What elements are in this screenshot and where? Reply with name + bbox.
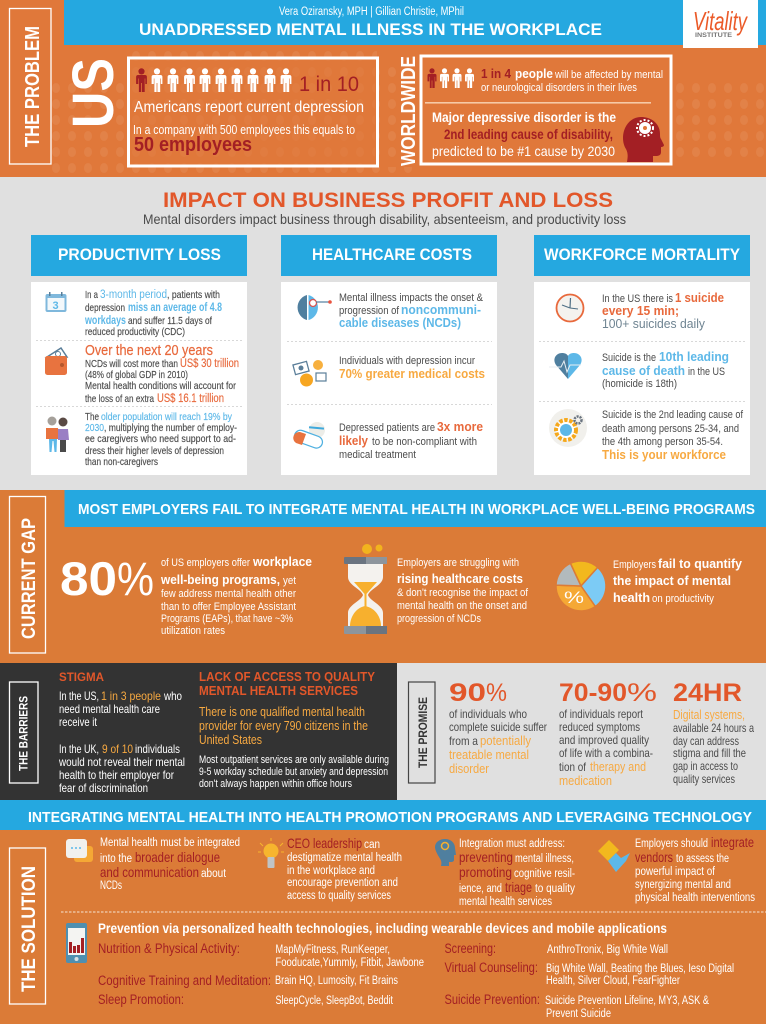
section tab: the barriers bbox=[10, 682, 38, 783]
panel heading: PRODUCTIVITY LOSS bbox=[58, 246, 221, 264]
text block: & don't recognise the impact of bbox=[397, 587, 529, 599]
logo: Vitality Institute bbox=[683, 0, 758, 48]
column: vendors: integrate bbox=[711, 835, 754, 850]
column: integration: mental health services bbox=[459, 896, 552, 908]
column: lack of access: United States bbox=[199, 733, 262, 747]
column: CEO leadership: can bbox=[364, 839, 380, 851]
text block: than non-caregivers bbox=[85, 456, 158, 468]
table: technologies, right column bbox=[444, 941, 734, 1020]
text block: every 15 min; bbox=[602, 303, 679, 318]
panel: the barriers bbox=[0, 663, 397, 800]
label: worldwide: WORLDWIDE bbox=[397, 56, 420, 166]
text block: the impact of mental bbox=[613, 573, 731, 588]
text block: 10th leading bbox=[659, 349, 729, 364]
panel: the promise bbox=[397, 663, 766, 800]
section tab: the problem: THE PROBLEM bbox=[21, 26, 44, 147]
text block: 3-month period bbox=[100, 289, 167, 301]
text block: the loss of an extra bbox=[85, 393, 154, 405]
text: 1 in 4 people: 1 in 4 bbox=[481, 66, 512, 81]
text block: utilization rates bbox=[161, 625, 225, 637]
column: 24HR: 24HR bbox=[673, 679, 742, 707]
text block: The bbox=[85, 411, 99, 423]
table: technologies, left column: SleepCycle, SleepBot, Beddit bbox=[276, 995, 394, 1007]
table: technologies, left column: Cognitive Training and Meditation: bbox=[98, 973, 271, 988]
column: 90%: complete suicide suffer bbox=[449, 720, 547, 734]
text block bbox=[602, 349, 729, 390]
text block: Mental illness impacts the onset & bbox=[339, 292, 484, 304]
text block: workdays bbox=[84, 313, 126, 327]
text block: Depressed patients are bbox=[339, 422, 435, 434]
icon: head profile bbox=[435, 839, 456, 866]
text block bbox=[602, 290, 724, 331]
text block bbox=[613, 556, 743, 605]
text block: US$ 16.1 trillion bbox=[157, 393, 224, 405]
column: vendors: synergizing mental and bbox=[635, 879, 731, 891]
text block: yet bbox=[283, 575, 296, 587]
panel: US statistics bbox=[128, 58, 378, 166]
text block: likely bbox=[339, 433, 369, 448]
text block bbox=[339, 292, 484, 330]
banner bbox=[0, 800, 766, 830]
icon: hourglass bbox=[344, 544, 387, 634]
text block bbox=[397, 557, 529, 625]
column: 70-90%: tion of bbox=[559, 760, 587, 774]
table: technologies, left column bbox=[98, 941, 424, 1007]
column: integration: ience, and bbox=[459, 883, 502, 895]
text block: NCDs will cost more than bbox=[85, 358, 178, 370]
column: integration: mental illness, bbox=[515, 853, 574, 865]
column: lack of access bbox=[199, 670, 389, 790]
text: 1 in 4 people bbox=[481, 66, 663, 94]
table: technologies, right column: Screening: bbox=[444, 941, 496, 956]
text block: few address mental health other bbox=[161, 588, 296, 600]
column: stigma: In the UK, bbox=[59, 742, 99, 756]
heading: IMPACT ON BUSINESS PROFIT AND LOSS bbox=[163, 188, 613, 212]
column: dialogue: broader dialogue bbox=[135, 849, 220, 865]
column: 90%: 90 bbox=[449, 679, 486, 707]
text block: Programs (EAPs), that have ~3% bbox=[161, 613, 293, 625]
column: vendors: powerful impact of bbox=[635, 866, 716, 878]
column: CEO leadership: destigmatize mental health bbox=[287, 852, 402, 864]
text block: 70% greater medical costs bbox=[339, 366, 485, 381]
text: prevention heading: Prevention via personalized health technologies, including wearable devices and mobile applications bbox=[98, 921, 667, 936]
column: stigma: fear of discrimination bbox=[59, 781, 148, 795]
text block: Mental health conditions will account for bbox=[85, 380, 236, 392]
text block bbox=[160, 554, 312, 637]
icon: brain with target bbox=[298, 295, 332, 320]
text block: workplace bbox=[252, 554, 312, 569]
text block: progression of NCDs bbox=[397, 613, 481, 625]
icon: phone with chart bbox=[66, 923, 87, 963]
column: lack of access: provider for every 790 citizens in the bbox=[199, 719, 368, 733]
label: US: US bbox=[61, 58, 126, 128]
column: stigma: 9 of 10 bbox=[102, 742, 133, 756]
column: vendors: to assess the bbox=[676, 853, 729, 865]
text block: 3x more bbox=[437, 419, 483, 434]
icon: wallet bbox=[45, 348, 67, 375]
column: dialogue: into the bbox=[100, 853, 132, 865]
column: lack of access: Most outpatient services are only available during bbox=[199, 754, 389, 766]
column: CEO leadership bbox=[287, 835, 402, 902]
section: impact on business bbox=[31, 188, 750, 475]
column: 24HR: stigma and fill the bbox=[673, 746, 746, 760]
chart: pie icon bbox=[556, 561, 606, 611]
column: stigma: individuals bbox=[135, 742, 180, 756]
table: technologies, left column: Fooducate,Yummly, Fitbit, Jawbone bbox=[276, 957, 424, 969]
icon: ten people bbox=[136, 68, 291, 92]
column: stigma: need mental health care bbox=[59, 702, 160, 716]
column: 70-90%: of individuals report bbox=[559, 707, 644, 721]
column: dialogue bbox=[100, 837, 240, 892]
text block bbox=[339, 419, 483, 461]
text block: older population will reach 19% by bbox=[101, 411, 233, 423]
column: 90%: disorder bbox=[449, 761, 490, 776]
icon: chat bubbles bbox=[66, 839, 93, 862]
column: stigma: health to their employer for bbox=[59, 768, 174, 782]
column: 70-90%: 70-90 bbox=[559, 679, 627, 707]
stat: 80%: % bbox=[117, 552, 154, 605]
icon: money and coins bbox=[293, 360, 326, 386]
section tab: the promise bbox=[408, 682, 435, 783]
text block: Employers bbox=[613, 559, 656, 571]
panel heading: WORKFORCE MORTALITY bbox=[544, 246, 740, 264]
text block: In the US there is bbox=[602, 293, 673, 305]
section tab: the promise: THE PROMISE bbox=[418, 697, 430, 768]
text block: Individuals with depression incur bbox=[339, 355, 475, 367]
table: technologies, right column: Health, Silver Cloud, FearFighter bbox=[546, 975, 680, 987]
column: 24HR bbox=[673, 679, 754, 786]
column: 90%: potentially bbox=[480, 733, 531, 748]
column: CEO leadership: CEO leadership bbox=[287, 835, 362, 851]
table: technologies, left column: Sleep Promotion: bbox=[98, 992, 184, 1007]
column: stigma bbox=[58, 670, 185, 795]
column: 90% bbox=[449, 679, 547, 776]
column: 24HR: quality services bbox=[673, 772, 735, 786]
panel: worldwide statistics bbox=[421, 56, 671, 164]
text: major depressive disorder: predicted to be #1 cause by 2030 bbox=[432, 143, 615, 159]
text block: to be non-compliant with bbox=[372, 436, 477, 448]
text block: well-being programs, bbox=[160, 572, 280, 587]
section: the solution bbox=[0, 800, 766, 1024]
stat: 80%: 80 bbox=[60, 552, 117, 605]
banner bbox=[64, 490, 766, 527]
icon: puzzle pieces bbox=[598, 840, 630, 872]
column: lack of access: don't always happen within office hours bbox=[199, 778, 352, 790]
column: 70-90%: therapy and bbox=[590, 759, 646, 774]
text block: This is your workforce bbox=[602, 447, 726, 462]
text block: progression of bbox=[339, 305, 400, 317]
text block bbox=[602, 409, 744, 462]
column: lack of access: MENTAL HEALTH SERVICES bbox=[199, 684, 358, 698]
text block: Suicide is the bbox=[602, 352, 656, 364]
icon: calendar bbox=[46, 292, 66, 312]
logo: Vitality Institute: INSTITUTE bbox=[695, 32, 733, 39]
text block: rising healthcare costs bbox=[397, 571, 523, 586]
header banner bbox=[64, 0, 766, 45]
panel heading: HEALTHCARE COSTS bbox=[312, 246, 472, 264]
text: 1 in 4 people: people bbox=[515, 66, 553, 81]
panel: workforce mortality bbox=[534, 235, 750, 475]
text: In a company with 500 employees this equals to bbox=[133, 122, 355, 137]
subheading: Mental disorders impact business through disability, absenteeism, and productivity loss bbox=[143, 211, 626, 227]
column: 70-90%: reduced symptoms bbox=[559, 720, 640, 734]
column: integration bbox=[459, 838, 575, 908]
text block: of US employers offer bbox=[161, 557, 250, 569]
icon: four people bbox=[428, 68, 474, 88]
column: 90%: from a bbox=[449, 734, 478, 748]
column: 90%: % bbox=[486, 679, 507, 707]
text: Americans report current depression bbox=[134, 99, 364, 116]
icon: clock bbox=[556, 294, 584, 322]
section tab: the problem bbox=[10, 8, 51, 164]
table: technologies, right column: Suicide Prevention: bbox=[444, 992, 540, 1007]
text block: cable diseases (NCDs) bbox=[339, 316, 461, 330]
chart: pie icon: % bbox=[564, 588, 584, 607]
text block bbox=[339, 355, 485, 381]
panel: productivity loss bbox=[31, 235, 247, 475]
icon: calendar: 3 bbox=[52, 300, 59, 312]
icon: older couple bbox=[46, 416, 69, 452]
text block: Employers are struggling with bbox=[397, 557, 519, 569]
text block: dress their higher levels of depression bbox=[85, 445, 224, 457]
text block: (homicide is 18th) bbox=[602, 378, 677, 390]
text block: 100+ suicides daily bbox=[602, 316, 705, 331]
column: stigma: would not reveal their mental bbox=[58, 755, 185, 769]
table: technologies, right column: Virtual Counseling: bbox=[444, 960, 538, 975]
column: stigma: receive it bbox=[59, 715, 98, 729]
section tab: current gap bbox=[10, 496, 46, 653]
section: current gap bbox=[0, 490, 766, 663]
text block: (48% of global GDP in 2010) bbox=[85, 369, 188, 381]
text block: miss an average of 4.8 bbox=[128, 300, 222, 314]
text block: medical treatment bbox=[339, 449, 416, 461]
stat: 1 in 10: 1 in 10 bbox=[299, 73, 359, 96]
text block: mental health on the onset and bbox=[397, 600, 527, 612]
text: major depressive disorder: 2nd leading cause of disability, bbox=[444, 126, 613, 142]
column: 70-90%: and improved quality bbox=[559, 733, 649, 747]
text: 1 in 4 people: will be affected by mental bbox=[554, 69, 663, 81]
column: integration: cognitive resil- bbox=[514, 868, 575, 880]
text block: fail to quantify bbox=[658, 556, 743, 571]
column: 24HR: day can address bbox=[673, 734, 739, 748]
column: dialogue: and communication bbox=[100, 864, 199, 880]
text block: 1 suicide bbox=[675, 290, 724, 305]
icon: pill bbox=[293, 422, 325, 450]
column: vendors: Employers should bbox=[635, 838, 708, 850]
table: technologies, right column: Suicide Prevention Lifeline, MY3, ASK & bbox=[545, 995, 709, 1007]
table: technologies, right column: AnthroTronix, Big White Wall bbox=[547, 944, 668, 956]
column: CEO leadership: access to quality services bbox=[287, 890, 391, 902]
section: the problem bbox=[0, 0, 766, 177]
column: lack of access: LACK OF ACCESS TO QUALITY bbox=[199, 670, 376, 684]
text: 1 in 4 people: or neurological disorders in their lives bbox=[481, 82, 637, 94]
text block: death among persons 25-34, and bbox=[602, 423, 739, 435]
column: lack of access: 9-5 workday schedule but anxiety and depression bbox=[199, 766, 388, 778]
text block: than to offer Employee Assistant bbox=[161, 601, 296, 613]
text: major depressive disorder bbox=[432, 109, 616, 159]
title: UNADDRESSED MENTAL ILLNESS IN THE WORKPLACE bbox=[139, 20, 602, 39]
text block: in the US bbox=[688, 366, 725, 378]
column: 70-90% bbox=[559, 679, 657, 788]
column: 24HR: gap in access to bbox=[673, 759, 738, 773]
column: 70-90%: of life with a combina- bbox=[559, 746, 653, 760]
text block: US$ 30 trillion bbox=[180, 358, 239, 370]
text block: Over the next 20 years bbox=[85, 343, 213, 359]
stat: 80% bbox=[60, 552, 154, 605]
column: 90%: treatable mental bbox=[449, 747, 529, 762]
panel: healthcare costs bbox=[281, 235, 497, 475]
icon: light bulb bbox=[258, 838, 284, 868]
byline: Vera Oziransky, MPH | Gillian Christie, MPhil bbox=[279, 6, 464, 18]
text block bbox=[84, 289, 222, 338]
table: technologies, right column: Prevent Suicide bbox=[546, 1008, 611, 1020]
column: 90%: of individuals who bbox=[449, 707, 527, 721]
column: 70-90%: % bbox=[627, 679, 657, 707]
column: lack of access: There is one qualified mental health bbox=[199, 705, 365, 719]
column: integration: triage bbox=[505, 879, 532, 895]
column: integration: Integration must address: bbox=[459, 838, 565, 850]
section tab: the barriers: THE BARRIERS bbox=[18, 696, 30, 771]
column: integration: preventing bbox=[459, 849, 513, 865]
stat: 50 employees: 50 employees bbox=[134, 134, 252, 156]
icon: heart with pulse bbox=[549, 353, 582, 379]
table: technologies, left column: MapMyFitness, RunKeeper, bbox=[276, 944, 390, 956]
text block: , patients with bbox=[167, 289, 220, 301]
text block: In a bbox=[85, 289, 98, 301]
text block: depression bbox=[85, 302, 125, 314]
text block: cause of death bbox=[602, 363, 685, 378]
column: vendors: vendors bbox=[635, 850, 673, 865]
column: 70-90%: medication bbox=[559, 773, 612, 788]
section tab: the solution bbox=[10, 848, 46, 1004]
column: CEO leadership: encourage prevention and bbox=[287, 877, 398, 889]
column: stigma: 1 in 3 people bbox=[101, 689, 161, 703]
text block: and suffer 11.5 days of bbox=[128, 315, 212, 327]
text block: the 4th among person 35-54. bbox=[602, 436, 723, 448]
table: technologies, left column: Nutrition & Physical Activity: bbox=[98, 941, 240, 956]
text block: , multiplying the number of employ- bbox=[104, 422, 237, 434]
text block bbox=[85, 343, 239, 405]
text block: 2030 bbox=[85, 422, 104, 434]
icon: gears with head bbox=[549, 409, 587, 447]
column: stigma: STIGMA bbox=[59, 670, 104, 684]
text block: ee caregivers who need support to ad- bbox=[85, 433, 236, 445]
column: dialogue: NCDs bbox=[100, 880, 122, 892]
column: CEO leadership: in the workplace and bbox=[287, 865, 375, 877]
text block: reduced productivity (CDC) bbox=[85, 326, 185, 338]
icon: head with gear bbox=[623, 117, 664, 162]
section tab: current gap: CURRENT GAP bbox=[19, 518, 40, 639]
text block bbox=[85, 411, 237, 468]
column: stigma: who bbox=[163, 689, 182, 703]
text block: noncommuni- bbox=[401, 303, 481, 317]
column: vendors bbox=[635, 835, 755, 904]
column: stigma: In the US, bbox=[59, 689, 99, 703]
column: integration: to quality bbox=[535, 883, 575, 895]
text block: health bbox=[613, 590, 650, 605]
column: dialogue: Mental health must be integrated bbox=[100, 837, 240, 849]
column: dialogue: about bbox=[201, 868, 227, 880]
column: integration: promoting bbox=[459, 864, 512, 880]
section tab: the solution: THE SOLUTION bbox=[19, 866, 40, 992]
text: major depressive disorder: Major depressive disorder is the bbox=[432, 109, 616, 125]
column: 24HR: Digital systems, bbox=[673, 707, 745, 722]
table: technologies, left column: Brain HQ, Lumosity, Fit Brains bbox=[275, 975, 398, 987]
text block: on productivity bbox=[652, 593, 714, 605]
